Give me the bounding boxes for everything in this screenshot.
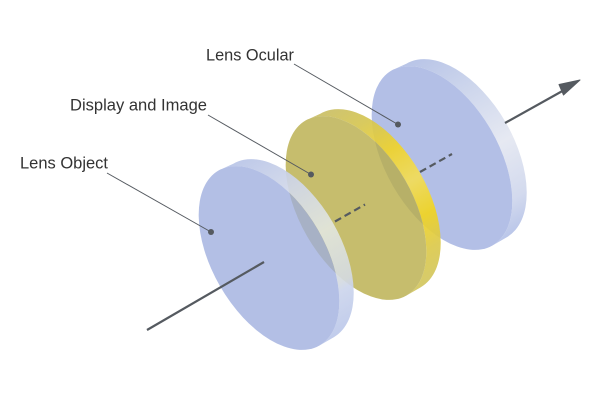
- lens ocular: [343, 34, 556, 274]
- dashed axis behind lens object: [335, 204, 365, 222]
- outgoing arrow: [505, 80, 580, 123]
- label: Lens Ocular: [206, 46, 401, 128]
- dashed axis behind display: [420, 154, 452, 172]
- label: Lens Object: [20, 154, 214, 235]
- incoming axis line: [147, 262, 264, 330]
- lens object: [170, 134, 383, 374]
- label: Lens Object: Lens Object: [20, 154, 108, 172]
- label: Display and Image: [70, 96, 314, 178]
- label: Lens Ocular: Lens Ocular: [206, 46, 294, 64]
- display and image disc: [257, 84, 470, 324]
- label: Display and Image: Display and Image: [70, 96, 207, 114]
